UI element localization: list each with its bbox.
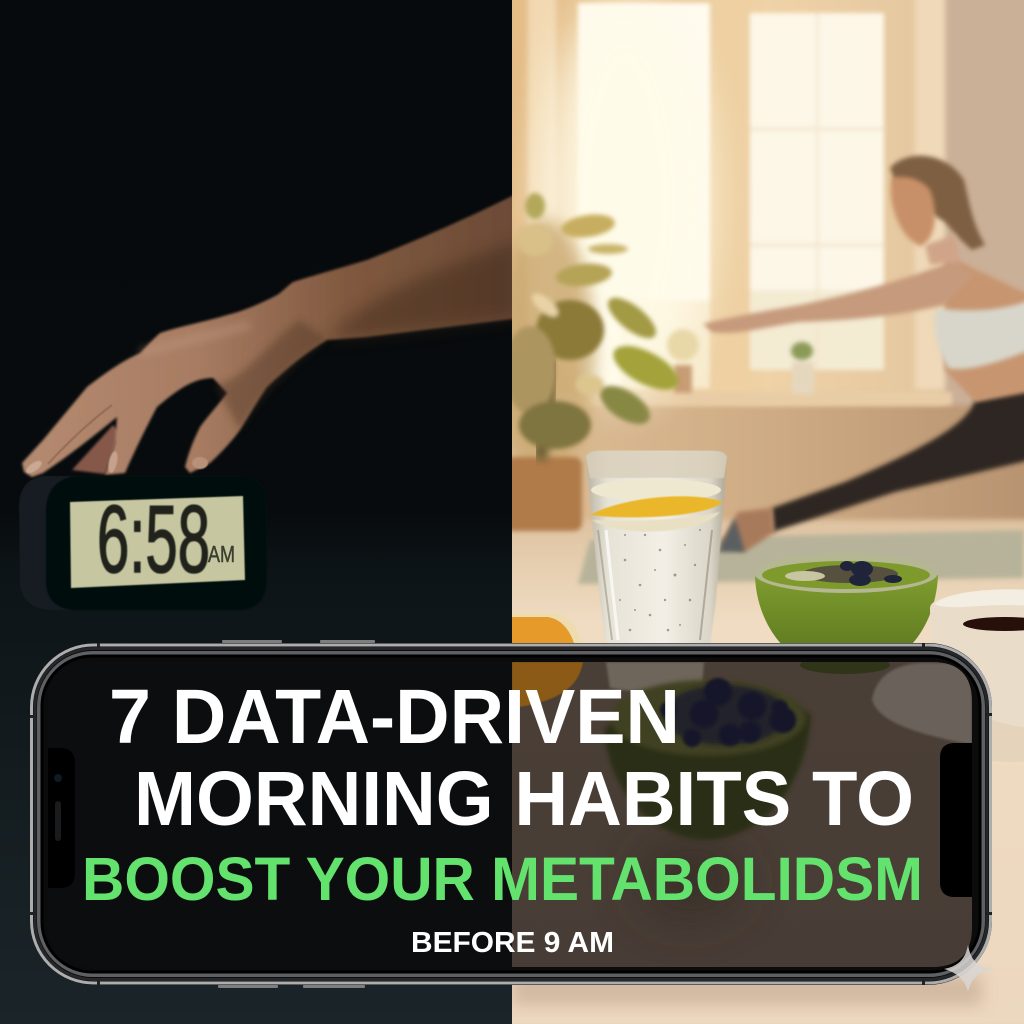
woman arm <box>703 260 975 333</box>
screen: dimmed right half scene <box>512 656 972 967</box>
phone left notch <box>48 748 75 888</box>
phone device shadow <box>512 975 982 1005</box>
title: line 2: MORNING HABITS TO <box>134 756 914 842</box>
dimmed lemon <box>512 662 583 708</box>
panel: bright right scene <box>495 0 1024 1024</box>
illustration: digital alarm clock <box>19 476 267 610</box>
panel: phone mockup <box>30 640 992 988</box>
illustration: glass of lemon water <box>586 450 728 643</box>
illustration: small sill pots <box>667 329 814 394</box>
phone right notch <box>940 743 972 897</box>
phone camera <box>54 774 62 782</box>
title: highlighted line 3: BOOST YOUR METABOLIDSM <box>82 845 923 913</box>
illustration: lemon half <box>512 613 581 643</box>
phone speaker <box>55 801 61 841</box>
phone side buttons <box>218 640 375 988</box>
dimmed green bowl base <box>800 662 890 674</box>
clock AM label: AM <box>208 541 235 567</box>
illustration: green smoothie bowl <box>755 561 938 643</box>
illustration: bright window <box>512 0 952 405</box>
subtitle: BEFORE 9 AM <box>411 927 614 959</box>
illustration: potted plant <box>495 193 685 531</box>
phone frame <box>30 643 992 985</box>
woman legs <box>772 388 1024 532</box>
clock time readout: 6:58 <box>97 486 210 593</box>
icon: sparkle watermark <box>944 945 992 992</box>
illustration: stretching woman <box>703 156 1024 552</box>
clock LCD screen <box>69 495 246 589</box>
dimmed plate <box>872 663 972 745</box>
panel: dark left scene <box>0 0 520 1024</box>
illustration: yoga mat <box>578 530 1024 584</box>
woman head and ponytail <box>890 156 985 250</box>
woman torso <box>945 255 1024 402</box>
water bubbles <box>619 529 701 631</box>
illustration: hand pressing alarm clock <box>22 192 520 477</box>
title: line 1: 7 DATA-DRIVEN <box>109 674 680 760</box>
dimmed glass <box>606 662 704 692</box>
dimmed blueberry bowl <box>604 678 811 840</box>
illustration: coffee cup and saucer <box>930 589 1024 631</box>
phone screen <box>512 662 972 967</box>
dimmed bowl shadow <box>644 845 730 915</box>
